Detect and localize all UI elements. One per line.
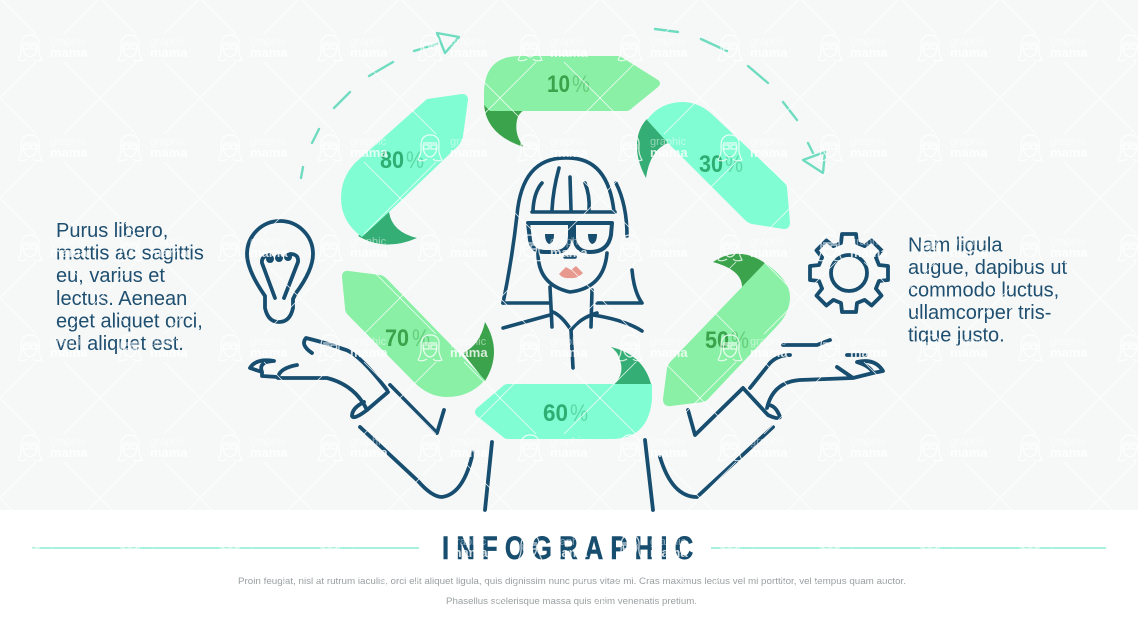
footer text: Proin feugiat, nisl at rutrum iaculis, orci elit aliquet ligula, quis dignissim nunc purus vitae mi. Cras maximus lectus vel mi porttitor, vel tempus quam auctor. [238,576,906,587]
footer text [238,576,906,607]
segment: 10%: 10 [547,71,570,98]
segment: 30%: % [725,151,743,178]
segment: 30% [637,102,790,229]
text block: left: eget aliquet orci, [56,310,203,332]
segment: 70%: % [412,325,430,352]
segment: 10%: % [572,71,590,98]
text block: right: ullamcorper tris- [908,302,1051,324]
text block: left: Purus libero, [56,220,168,242]
segment: 70%: 70 [385,325,409,352]
woman: eyes [545,234,597,244]
text block: right: augue, dapibus ut [908,257,1067,279]
segment: 80%: 80 [380,147,404,174]
woman: lips [559,266,583,278]
segment: 10% [484,56,660,147]
segment: 70% [342,271,494,397]
text block: left: mattis ac sagittis [56,243,204,265]
footer panel [0,510,1138,640]
right arm and hand [645,340,883,510]
title: INFOGRAPHIC [442,531,693,567]
segment: 30%: 30 [699,151,723,178]
footer rule: right [711,547,1106,549]
text block: right: Nam ligula [908,234,1003,256]
text block: right [908,234,1067,347]
segment: 80%: % [406,147,424,174]
footer text: Phasellus scelerisque massa quis enim venenatis pretium. [446,596,697,607]
dashed arc arrow: right [655,29,825,173]
icon: light bulb [247,221,313,322]
footer rule: left [32,547,419,549]
segment: 60% [475,347,652,439]
segment: 50% [663,254,790,406]
text block: left: eu, varius et [56,265,165,287]
segment: 50%: 50 [705,327,729,354]
background [0,0,1138,510]
woman: head and hair [503,158,642,368]
text block: left: vel aliquet est. [56,333,184,355]
icon: gear [810,234,888,312]
text block: right: commodo luctus, [908,280,1059,302]
text block: right: tique justo. [908,325,1005,347]
text block: left: lectus. Aenean [56,288,187,310]
segment: 60%: 60 [543,400,568,427]
dashed arc arrow: left [301,33,459,178]
segment: 80% [341,94,468,245]
text block: left [56,220,204,355]
left arm and hand [250,338,492,510]
segment: 50%: % [731,327,749,354]
segment: 60%: % [570,400,588,427]
